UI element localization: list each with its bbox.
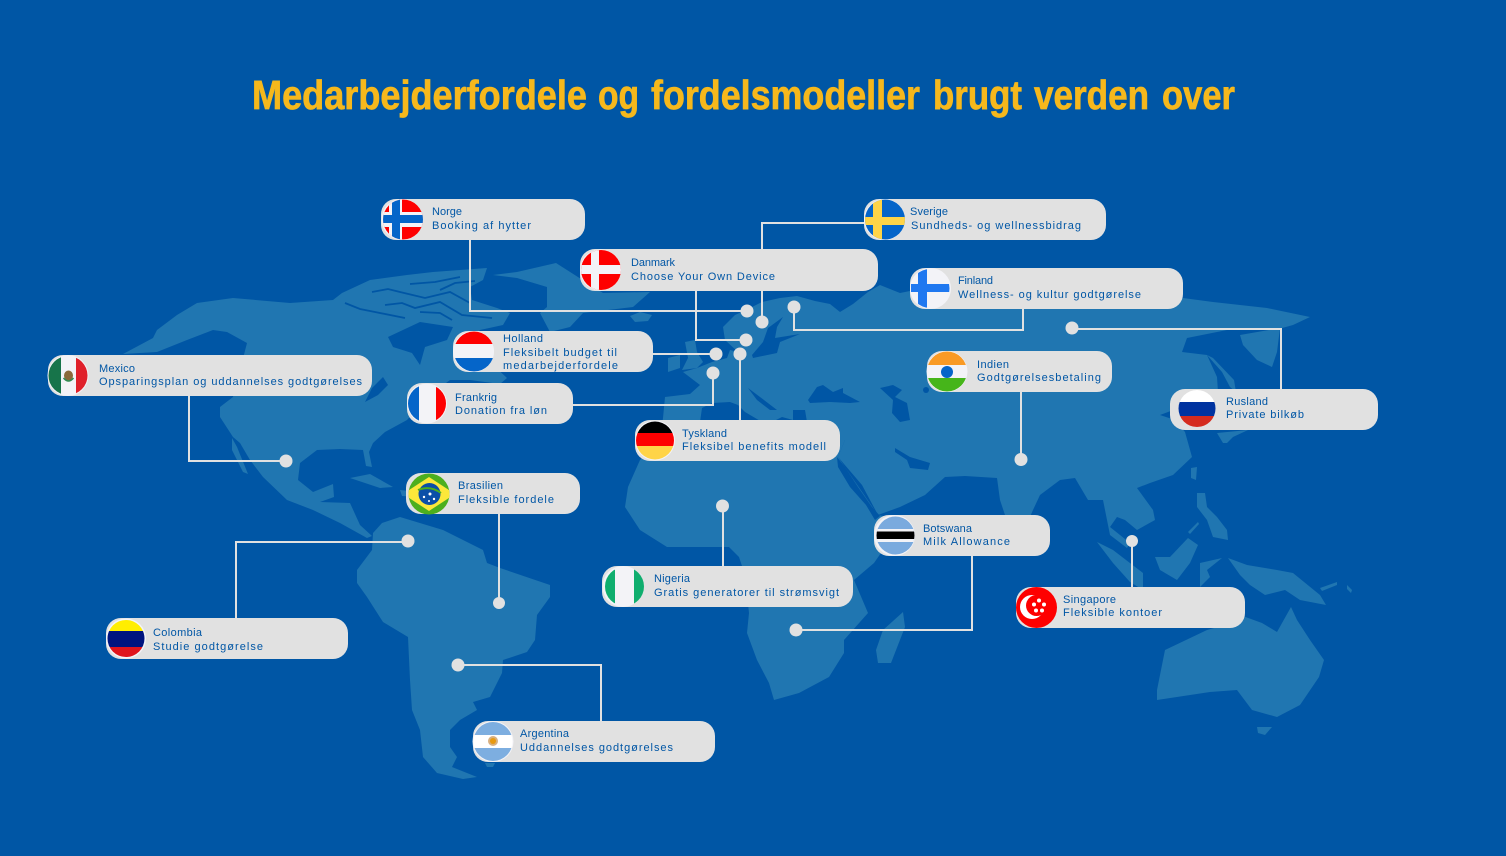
connector: Botswana: [796, 555, 972, 630]
text: Norge: Booking af hytter: [432, 220, 531, 232]
Arctic channels: [345, 277, 492, 320]
text: Norge: Norge: [432, 206, 462, 218]
flag: Tyskland: [635, 420, 676, 461]
callout: Mexico: [48, 355, 372, 468]
text: Nigeria: Nigeria: [654, 573, 691, 585]
marker: Colombia: [402, 534, 414, 548]
pill: Danmark: [580, 249, 878, 291]
callout: Tyskland: [635, 348, 840, 461]
Palawan: [1188, 522, 1199, 534]
callout: Holland: [453, 331, 722, 372]
pill: Frankrig: [407, 383, 573, 424]
flag: Mexico: [48, 355, 89, 396]
Greenland: [493, 263, 650, 332]
Sakhalin: [1207, 355, 1236, 392]
marker: Indien: [1014, 453, 1028, 466]
text: Danmark: Danmark: [631, 257, 676, 269]
callout: Nigeria: [602, 500, 853, 607]
marker: Mexico: [280, 454, 292, 468]
Sumatra: [1097, 542, 1143, 590]
world map: [123, 263, 1352, 779]
flag: Sverige: [864, 199, 905, 240]
text: Colombia: Studie godtgørelse: [153, 641, 263, 653]
callout: Argentina: [452, 658, 715, 762]
pill: Indien: [927, 351, 1112, 392]
text: Botswana: Milk Allowance: [923, 536, 1010, 548]
text: Holland: Fleksibelt budget til: [503, 347, 617, 359]
text: Botswana: [923, 523, 1010, 548]
marker: Sverige: [756, 316, 768, 328]
marker: Holland: [710, 348, 722, 360]
Iceland: [630, 312, 652, 322]
connector: Indien: [1020, 391, 1022, 459]
marker: Finland: [788, 300, 800, 314]
marker: Brasilien: [493, 597, 505, 609]
text: Mexico: [99, 363, 362, 388]
callout: Rusland: [1066, 322, 1378, 430]
title: over: [1162, 72, 1235, 118]
text: Brasilien: Brasilien: [458, 480, 503, 492]
text: Danmark: Choose Your Own Device: [631, 271, 775, 283]
pill: Norge: [381, 199, 585, 240]
text: Indien: [977, 359, 1101, 384]
flag: Botswana: [874, 515, 916, 556]
pill: Sverige: [864, 199, 1106, 240]
text: Nigeria: Gratis generatorer til strømsvigt: [654, 587, 839, 599]
Adriatic Sea: [748, 388, 777, 410]
connector: Tyskland: [739, 354, 741, 421]
callout: Singapore: [1016, 535, 1245, 628]
title: Medarbejderfordele: [252, 72, 587, 118]
Australia: [1157, 607, 1324, 717]
text: Singapore: [1063, 594, 1162, 619]
New Britain: [1320, 582, 1337, 591]
Borneo: [1155, 538, 1198, 580]
connector: Argentina: [458, 665, 601, 722]
text: Holland: [503, 333, 618, 372]
pill: Finland: [910, 268, 1183, 309]
marker: Norge: [740, 304, 754, 318]
Hudson Bay: [388, 322, 453, 365]
connector: Mexico: [189, 395, 286, 461]
Falkland Islands: [485, 763, 495, 767]
text: Danmark: [631, 257, 775, 283]
text: Singapore: Fleksible kontoer: [1063, 607, 1162, 619]
text: Holland: Holland: [503, 333, 543, 345]
callout: Sverige: [756, 199, 1106, 328]
text: Frankrig: Donation fra løn: [455, 405, 547, 417]
flag: Rusland: [1178, 389, 1216, 428]
text: Frankrig: Frankrig: [455, 392, 497, 404]
text: Colombia: [153, 627, 263, 653]
connector: Brasilien: [498, 513, 500, 603]
Eurasia: [660, 280, 1310, 548]
callout: Colombia: [106, 534, 414, 659]
text: Sverige: Sundheds- og wellnessbidrag: [911, 220, 1081, 232]
marker: Singapore: [1126, 535, 1138, 547]
pill: Singapore: [1016, 587, 1245, 628]
Baltic Sea: [752, 317, 800, 358]
Black Sea: [808, 385, 860, 403]
text: Tyskland: Tyskland: [682, 428, 727, 440]
pill: Colombia: [106, 618, 348, 659]
flag: Nigeria: [602, 566, 645, 607]
connector: Rusland: [1072, 329, 1281, 390]
text: Indien: Godtgørelsesbetaling: [977, 372, 1101, 384]
pill: Nigeria: [602, 566, 853, 607]
pill: Holland: [453, 331, 653, 372]
text: Rusland: Rusland: [1226, 396, 1268, 408]
text: Nigeria: [654, 573, 839, 599]
flag: Frankrig: [407, 383, 447, 424]
title: verden: [1034, 72, 1149, 118]
marker: Rusland: [1066, 322, 1078, 334]
flag: Danmark: [580, 249, 622, 291]
text: Tyskland: Fleksibel benefits modell: [682, 441, 826, 453]
pill: Rusland: [1170, 389, 1378, 430]
text: Holland: medarbejderfordele: [503, 360, 618, 372]
title: [252, 72, 1235, 118]
text: Indien: Indien: [977, 359, 1009, 371]
connector: Norge: [470, 239, 747, 311]
flag: Brasilien: [408, 474, 450, 514]
Mediterranean Sea: [700, 402, 762, 422]
callout: Botswana: [790, 515, 1050, 636]
North America: [123, 268, 510, 538]
Kamchatka: [1240, 328, 1280, 367]
callout: Indien: [926, 351, 1112, 466]
marker: Botswana: [790, 624, 802, 636]
text: Rusland: [1226, 396, 1304, 421]
callout: Danmark: [580, 249, 878, 346]
marker: Nigeria: [716, 500, 729, 512]
Sulawesi: [1200, 558, 1222, 587]
Tasmania: [1257, 727, 1272, 735]
pill: Botswana: [874, 515, 1050, 556]
marker: Tyskland: [734, 348, 746, 360]
title: brugt: [933, 72, 1022, 118]
connector: Finland: [794, 308, 1023, 330]
marker: Danmark: [740, 334, 752, 346]
Great Lakes: [365, 377, 388, 402]
text: Sverige: [910, 206, 1081, 232]
text: Mexico: Opsparingsplan og uddannelses godtgørelses: [99, 376, 362, 388]
Africa: [625, 440, 905, 700]
callout: Norge: [381, 199, 754, 318]
text: Tyskland: [682, 428, 826, 453]
South America: [357, 517, 550, 779]
connector: Danmark: [696, 290, 746, 340]
flag: Finland: [910, 268, 951, 309]
flag: Argentina: [472, 721, 514, 762]
text: Brasilien: [458, 480, 554, 506]
marker: Argentina: [452, 658, 464, 672]
Britain and Ireland: [682, 340, 703, 370]
text: Argentina: [520, 728, 674, 754]
pill: Brasilien: [406, 473, 580, 514]
text: Brasilien: Fleksible fordele: [458, 494, 554, 506]
flag: Colombia: [106, 618, 146, 659]
text: Rusland: Private bilkøb: [1226, 409, 1304, 421]
text: Sverige: Sverige: [910, 206, 948, 218]
pill: Argentina: [473, 721, 715, 762]
marker: Frankrig: [706, 366, 720, 380]
text: Argentina: Uddannelses godtgørelses: [520, 742, 674, 754]
New Guinea: [1228, 558, 1326, 605]
Madagascar: [876, 612, 905, 663]
text: Frankrig: [455, 392, 547, 417]
connector: Frankrig: [572, 373, 713, 405]
connector: Sverige: [762, 223, 866, 322]
Cuba and Hispaniola: [350, 474, 393, 488]
callout: Finland: [788, 268, 1183, 330]
Philippines: [1197, 493, 1228, 540]
Aral Sea: [923, 387, 929, 393]
flag: Holland: [453, 331, 495, 372]
Japan: [1217, 430, 1248, 443]
text: Singapore: Singapore: [1063, 594, 1116, 606]
flag: Singapore: [1016, 587, 1057, 628]
flag: Indien: [926, 351, 968, 392]
Taiwan: [1191, 467, 1197, 480]
text: Argentina: Argentina: [520, 728, 570, 740]
text: Botswana: Botswana: [923, 523, 973, 535]
callout: Frankrig: [407, 366, 720, 424]
text: Colombia: Colombia: [153, 627, 203, 639]
callout: Brasilien: [403, 473, 580, 609]
Caspian Sea: [880, 385, 910, 422]
text: Finland: [958, 275, 1141, 301]
Persian Gulf: [895, 448, 930, 470]
pill: Mexico: [48, 355, 372, 396]
title: fordelsmodeller: [651, 72, 920, 118]
pill: Tyskland: [635, 420, 840, 461]
Baja California: [232, 438, 248, 474]
text: Norge: [432, 206, 531, 232]
connector: Colombia: [236, 542, 408, 619]
connector: Nigeria: [722, 506, 724, 567]
connector: Singapore: [1131, 541, 1133, 588]
title: og: [598, 72, 639, 118]
Red Sea: [837, 457, 880, 520]
text: Finland: Wellness- og kultur godtgørelse: [958, 289, 1141, 301]
text: Mexico: Mexico: [99, 363, 135, 375]
connector: Holland: [652, 353, 716, 355]
flag: Norge: [382, 199, 424, 240]
text: Finland: Finland: [958, 275, 993, 287]
